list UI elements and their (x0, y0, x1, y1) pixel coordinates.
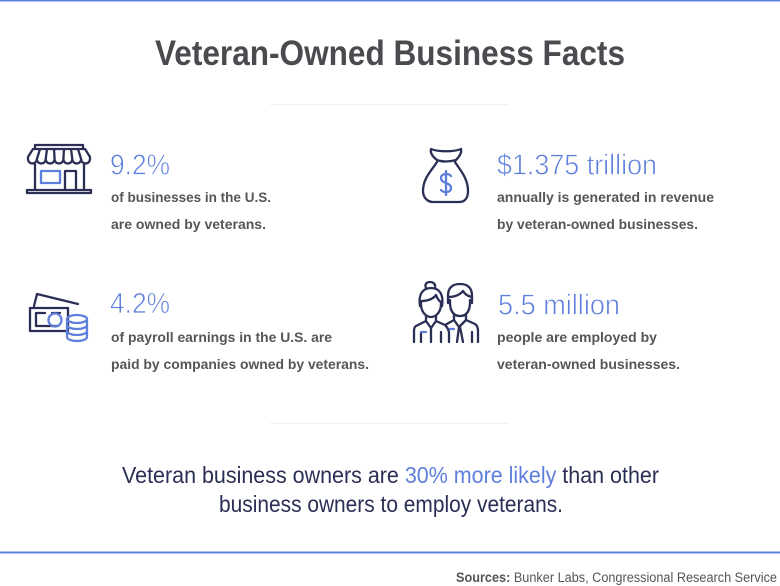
panel: businesses owned (27, 145, 271, 232)
stat: 4.2%: 4.2% (110, 288, 170, 320)
text: revenue description: by veteran-owned businesses. (497, 217, 698, 232)
text: payroll description: of payroll earnings in the U.S. are (111, 330, 332, 345)
text: employment description: veteran-owned businesses. (497, 357, 680, 372)
panel: employment (414, 282, 680, 372)
title: Veteran-Owned Business Facts (155, 34, 625, 73)
panel: revenue (423, 149, 715, 232)
text: businesses description: are owned by veterans. (111, 217, 266, 232)
text: payroll description: paid by companies owned by veterans. (111, 357, 369, 372)
icon: storefront (27, 145, 91, 193)
callout: business owners to employ veterans. (219, 491, 563, 517)
stat: 5.5 million: 5.5 million (498, 290, 620, 322)
icon: two people (414, 282, 478, 342)
callout: Veteran business owners are 30% more likely than other (122, 462, 666, 488)
icon: cash and coins (30, 294, 87, 341)
stat: $1.375 trillion: $1.375 trillion (497, 150, 657, 182)
text: businesses description: of businesses in the U.S. (111, 190, 271, 205)
panel: payroll (30, 288, 369, 372)
icon: money bag (423, 149, 468, 202)
stat: 9.2%: 9.2% (110, 150, 170, 182)
text: employment description: people are employed by (497, 330, 657, 345)
text: revenue description: annually is generated in revenue (497, 190, 715, 205)
